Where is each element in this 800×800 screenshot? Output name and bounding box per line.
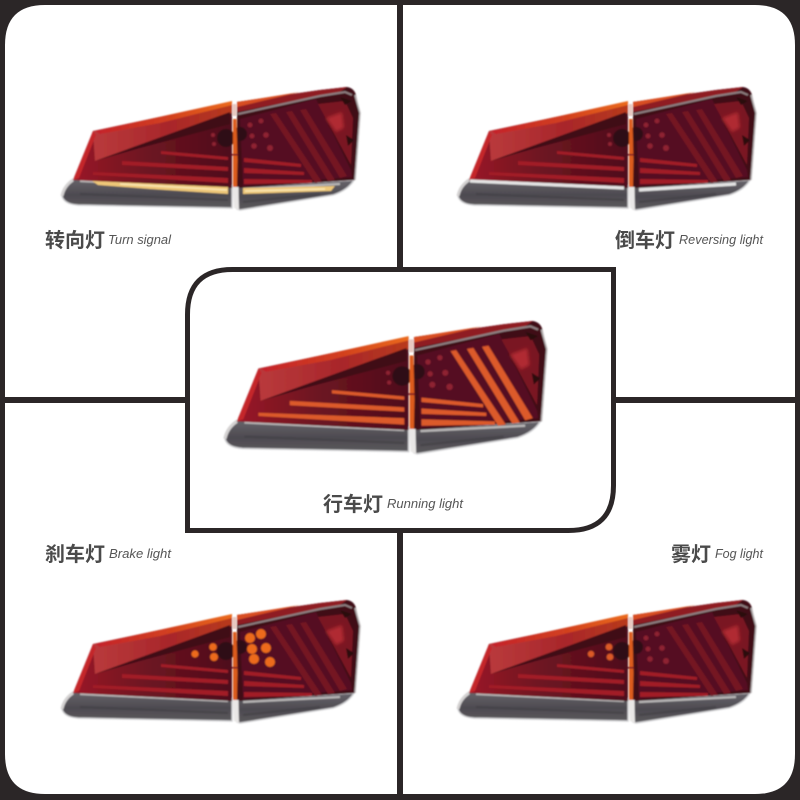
panel: brake light — [5, 403, 397, 794]
label: running light: 行车灯 — [323, 492, 383, 516]
label: turn signal — [45, 229, 172, 252]
label: turn signal: 转向灯 — [45, 229, 105, 252]
label: fog light — [671, 543, 764, 566]
tail lamp: fog light lit — [458, 600, 756, 723]
label: reversing light: 倒车灯 — [615, 228, 675, 252]
label: reversing light — [615, 228, 764, 252]
panel: turn signal — [5, 5, 397, 397]
label: turn signal: Turn signal — [108, 233, 172, 247]
label: reversing light: Reversing light — [679, 233, 764, 247]
tail lamp: running light lit — [225, 321, 547, 454]
tail lamp: brake light lit — [62, 600, 360, 723]
label: brake light: 刹车灯 — [45, 542, 105, 566]
tail lamp: turn signal lit — [62, 87, 360, 210]
panel: reversing light — [403, 5, 795, 397]
label: brake light: Brake light — [109, 547, 172, 561]
label: brake light — [45, 542, 172, 566]
label: fog light: Fog light — [715, 547, 764, 561]
panel: fog light — [403, 403, 795, 794]
tail lamp: reversing light lit — [458, 87, 756, 210]
label: running light: Running light — [387, 497, 464, 511]
label: fog light: 雾灯 — [671, 543, 711, 566]
label: running light — [323, 492, 464, 516]
panel: running light — [188, 270, 614, 530]
